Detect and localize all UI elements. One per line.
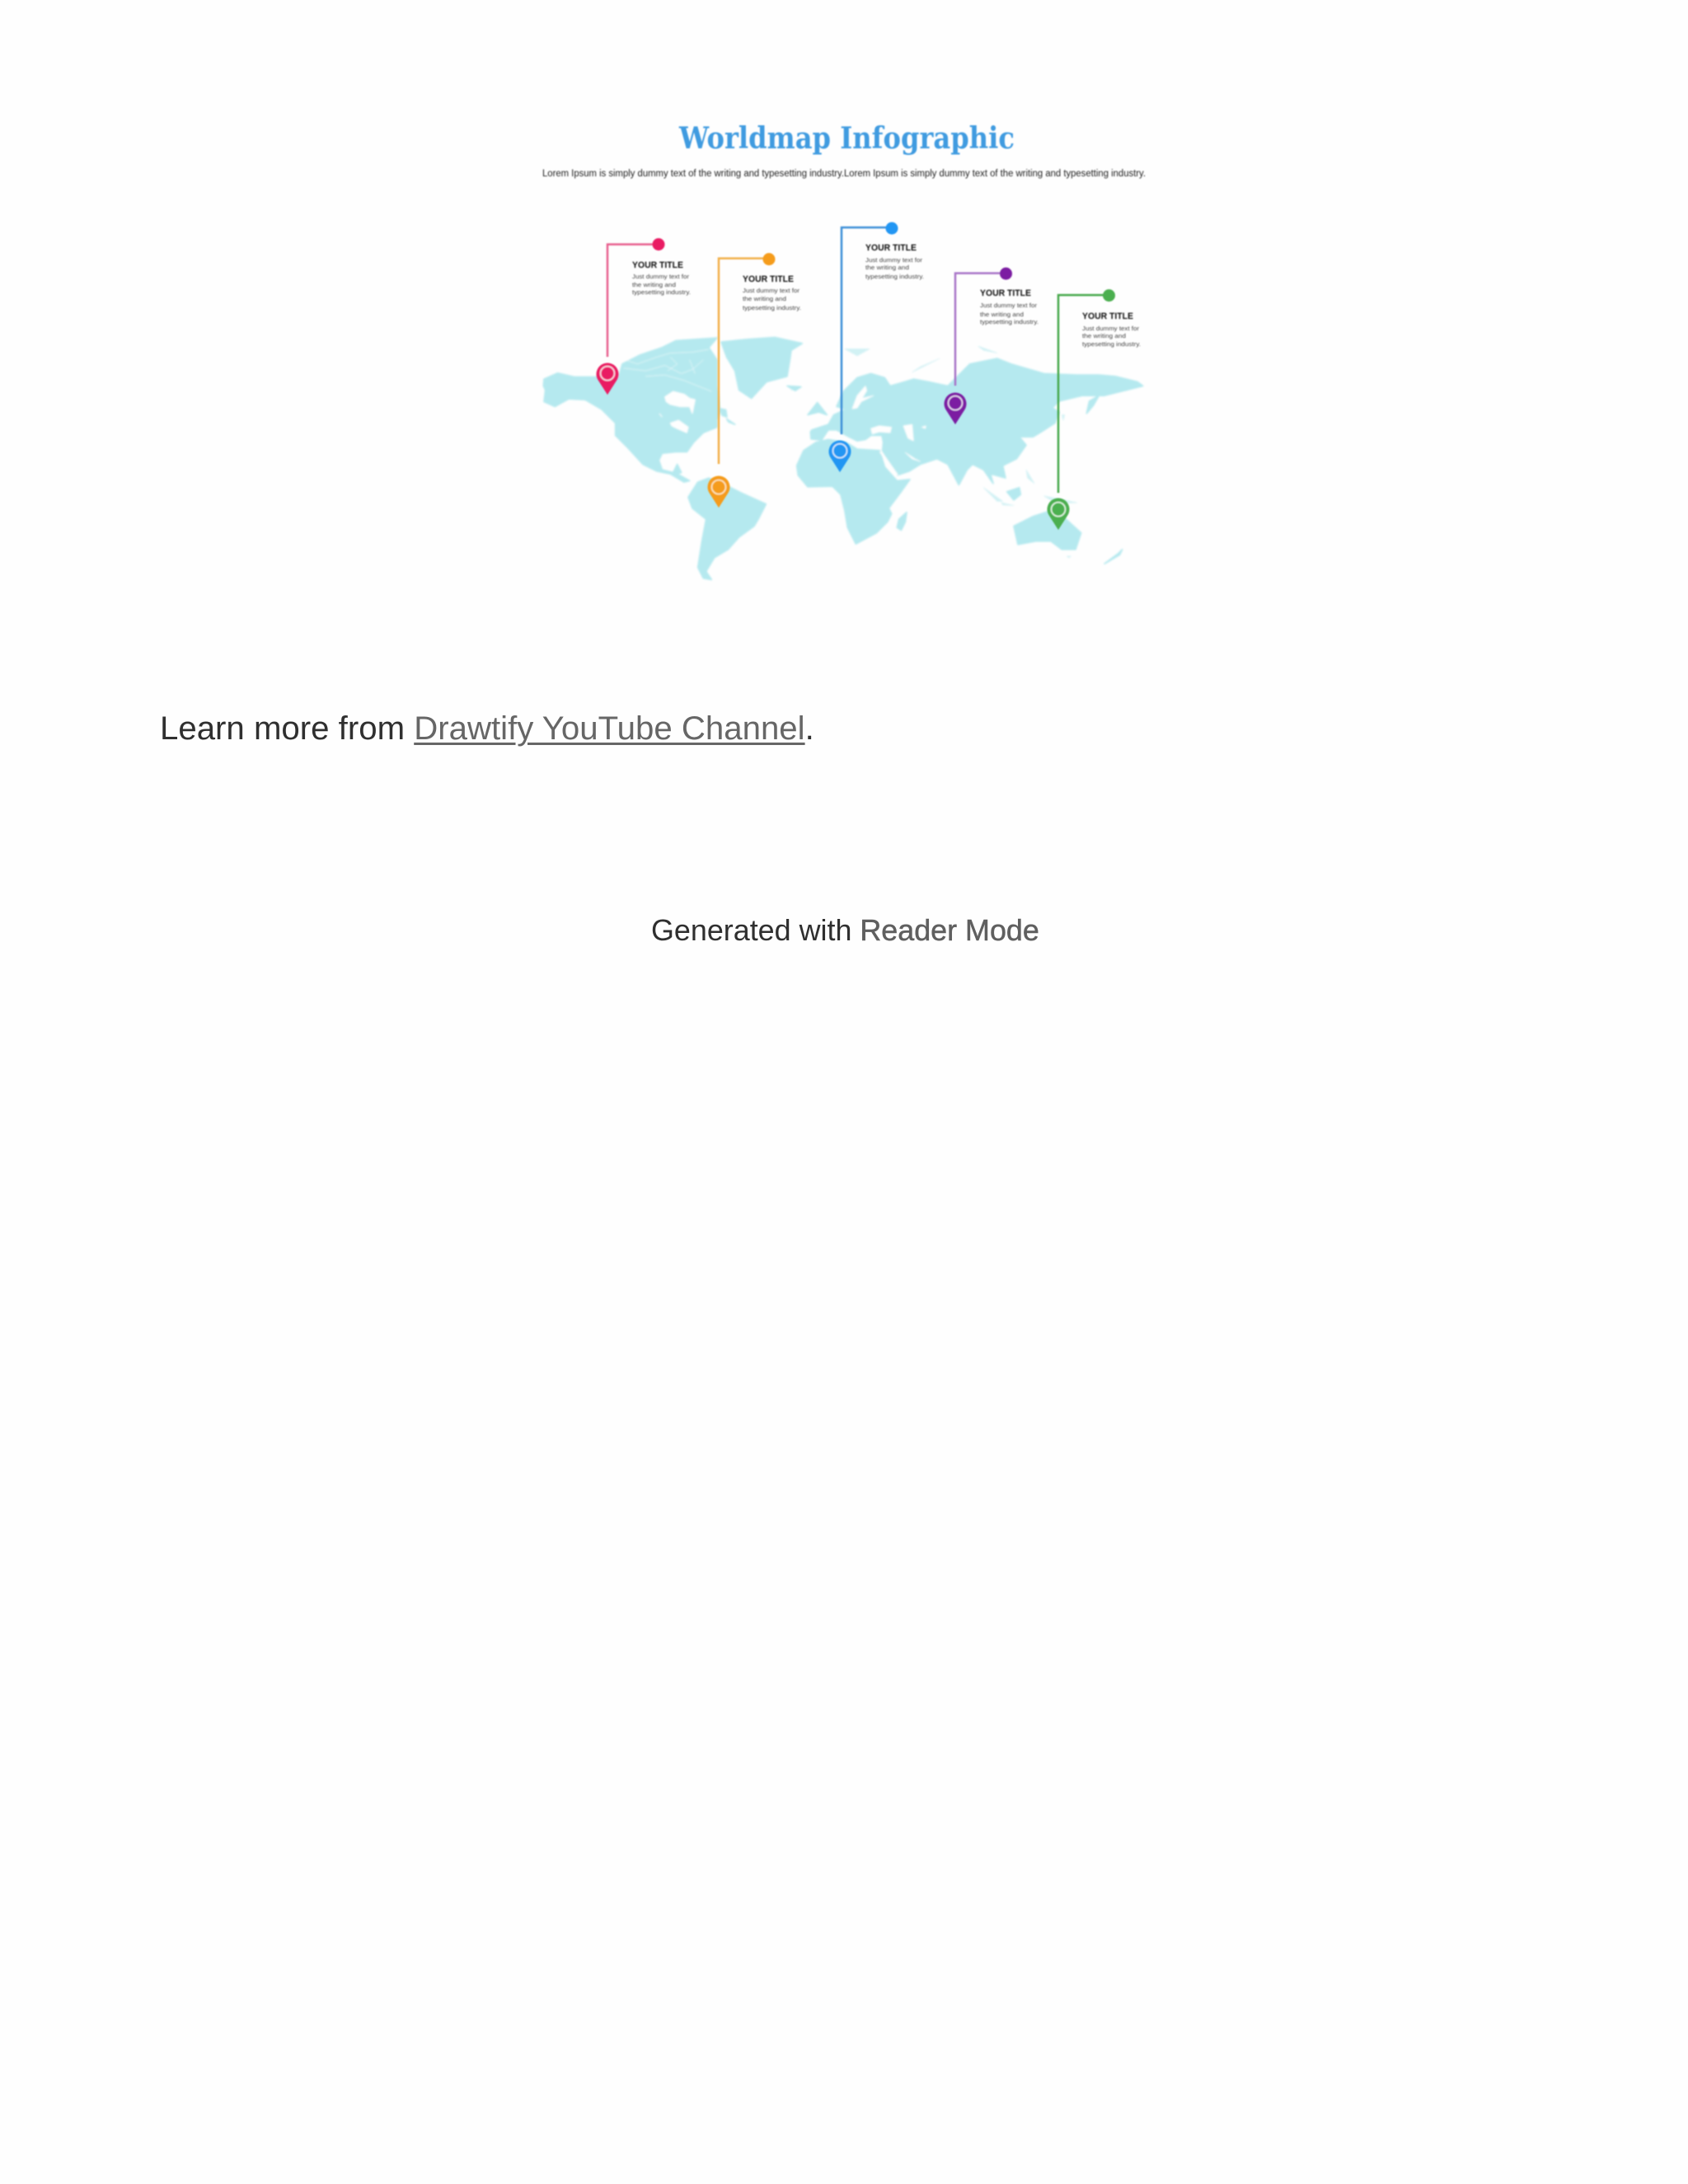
label: pink: YOUR TITLE <box>632 260 683 270</box>
subtitle: Lorem Ipsum is simply dummy text of the writing and typesetting industry.Lorem Ipsum is simply dummy text of the writing and typesetting industry. <box>542 169 1146 179</box>
label: pink <box>632 260 691 296</box>
label: pink: typesetting industry. <box>632 288 691 296</box>
label: orange: Just dummy text for <box>743 287 800 294</box>
label: blue: the writing and <box>865 264 909 271</box>
marker: orange <box>707 253 775 508</box>
label: green: typesetting industry. <box>1082 340 1141 348</box>
label: orange: typesetting industry. <box>743 304 801 312</box>
label: orange: YOUR TITLE <box>743 274 794 284</box>
label: purple <box>980 288 1039 326</box>
world map <box>543 337 1143 579</box>
label: orange <box>743 274 801 312</box>
label: purple: YOUR TITLE <box>980 288 1031 298</box>
label: blue: typesetting industry. <box>865 273 924 280</box>
label: purple: the writing and <box>980 311 1024 318</box>
label: purple: typesetting industry. <box>980 318 1039 326</box>
label: purple: Just dummy text for <box>980 302 1038 309</box>
marker: green <box>1047 289 1115 530</box>
marker: purple <box>945 267 1012 424</box>
marker: pink <box>597 238 664 395</box>
map: Eurasia, Africa and Oceania <box>791 346 1143 564</box>
label: pink: Just dummy text for <box>632 273 690 280</box>
label: blue <box>865 243 924 280</box>
footer: generated with Reader Mode: Generated with Reader Mode <box>651 914 1039 947</box>
marker: blue <box>829 223 898 472</box>
label: green: the writing and <box>1082 332 1126 340</box>
label: blue: YOUR TITLE <box>865 243 917 253</box>
label: pink: the writing and <box>632 281 676 288</box>
label: green: YOUR TITLE <box>1082 312 1133 321</box>
label: orange: the writing and <box>743 295 786 302</box>
label: green: Just dummy text for <box>1082 325 1140 332</box>
learn more text: Learn more from Drawtify YouTube Channel. <box>160 710 814 747</box>
title: Worldmap Infographic <box>678 121 1015 156</box>
label: green <box>1082 312 1141 348</box>
label: blue: Just dummy text for <box>865 256 923 264</box>
map: Americas and Greenland <box>543 337 802 579</box>
